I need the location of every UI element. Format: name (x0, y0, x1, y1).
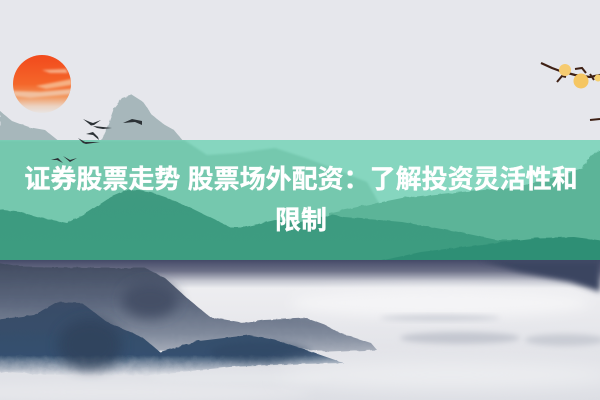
sky background (0, 0, 600, 140)
flock of birds (51, 119, 142, 163)
distant grey mountains (0, 95, 184, 142)
lowest ridge (382, 236, 600, 260)
title (24, 164, 578, 235)
front ridge (0, 302, 344, 378)
back ridge (0, 262, 377, 352)
teal title banner (0, 140, 600, 265)
banner left haze (0, 140, 378, 228)
misty ink mountains (0, 260, 600, 400)
title: 证券股票走势 股票场外配资：了解投资灵活性和 (24, 164, 578, 194)
dark teal ridge (0, 190, 517, 260)
right mid-tone ridge (329, 150, 600, 241)
red sun (12, 55, 72, 113)
flowering branch (541, 63, 600, 120)
title: 限制 (275, 205, 327, 235)
